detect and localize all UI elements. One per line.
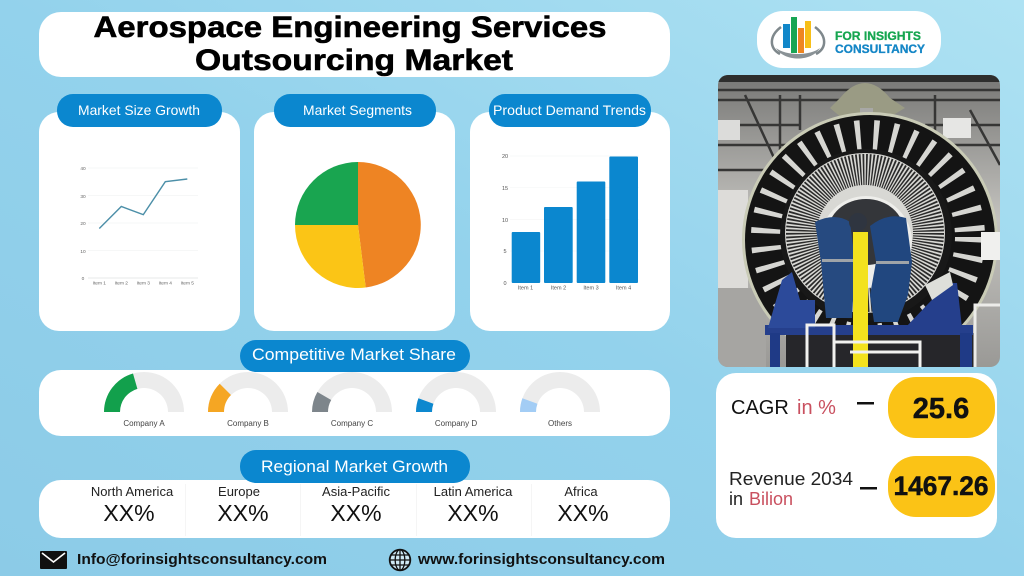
bar chart: 0 bbox=[503, 281, 507, 287]
heading: market size growth bbox=[57, 94, 222, 127]
stat: latin america: XX% bbox=[447, 500, 499, 526]
photo: engine technicians bbox=[718, 75, 1000, 368]
pie chart bbox=[295, 162, 421, 288]
line chart: Item 3 bbox=[137, 280, 150, 286]
heading: product demand trends bbox=[489, 94, 651, 127]
line chart: Item 1 bbox=[93, 280, 106, 286]
title panel: Aerospace Engineering Services bbox=[94, 11, 606, 44]
stat: revenue 2034: in bbox=[729, 489, 743, 509]
line chart: 20 bbox=[80, 221, 86, 227]
bar chart: 20 bbox=[502, 154, 508, 160]
heading: regional market growth bbox=[240, 450, 470, 483]
heading: market size growth: Market Size Growth bbox=[78, 102, 200, 118]
icon: envelope bbox=[40, 551, 67, 569]
stat: europe: XX% bbox=[217, 500, 269, 526]
line chart: 10 bbox=[80, 249, 86, 255]
bar chart: 5 bbox=[503, 249, 507, 255]
gauge: company c bbox=[312, 372, 392, 428]
stat: revenue 2034 bbox=[729, 456, 995, 517]
gauge: company d: Company D bbox=[435, 419, 477, 428]
stat: cagr: CAGR bbox=[731, 397, 789, 419]
title panel: Outsourcing Market bbox=[195, 44, 513, 77]
gauge: company a bbox=[104, 372, 184, 428]
panel: competitive market share bbox=[39, 340, 670, 436]
heading: competitive market share: Competitive Market Share bbox=[252, 345, 456, 364]
stat: north america: North America bbox=[91, 484, 174, 499]
gauge: company d bbox=[416, 372, 496, 428]
bar chart: Item 4 bbox=[616, 286, 631, 292]
bar chart bbox=[502, 154, 639, 292]
contact website: www.forinsightsconsultancy.com bbox=[417, 551, 665, 568]
stat: africa: Africa bbox=[564, 484, 598, 499]
line chart bbox=[80, 166, 198, 286]
panel: regional market growth bbox=[39, 450, 670, 538]
heading: market segments bbox=[274, 94, 436, 127]
heading: product demand trends: Product Demand Trends bbox=[493, 102, 646, 118]
stat: asia-pacific bbox=[322, 484, 390, 526]
line chart: Item 4 bbox=[159, 280, 172, 286]
line chart: 40 bbox=[80, 166, 86, 172]
title panel bbox=[39, 11, 670, 77]
stat: revenue 2034: Bilion bbox=[749, 489, 793, 509]
stat: revenue 2034: Revenue 2034 bbox=[729, 469, 853, 489]
panel: market segments bbox=[254, 94, 455, 331]
heading: regional market growth: Regional Market Growth bbox=[261, 457, 448, 476]
contact email: Info@forinsightsconsultancy.com bbox=[77, 551, 327, 568]
bar chart: Item 1 bbox=[518, 286, 533, 292]
gauge: company b bbox=[208, 372, 288, 428]
line chart: Item 2 bbox=[115, 280, 128, 286]
stat: asia-pacific: Asia-Pacific bbox=[322, 484, 390, 499]
stat: asia-pacific: XX% bbox=[330, 500, 382, 526]
stat: latin america bbox=[434, 484, 513, 526]
gauge: others bbox=[520, 372, 600, 428]
panel: product demand trends bbox=[470, 94, 670, 331]
stat: revenue 2034: 1467.26 bbox=[894, 471, 988, 501]
gauge: company a: Company A bbox=[123, 419, 165, 428]
stat: latin america: Latin America bbox=[434, 484, 513, 499]
stat: north america: XX% bbox=[103, 500, 155, 526]
logo: CONSULTANCY bbox=[835, 42, 925, 56]
gauge: company b: Company B bbox=[227, 419, 269, 428]
line chart: Item 5 bbox=[181, 280, 194, 286]
heading: market segments: Market Segments bbox=[303, 102, 412, 118]
bar chart: Item 3 bbox=[583, 286, 599, 292]
line chart: 30 bbox=[80, 194, 86, 200]
bar chart: Item 2 bbox=[551, 286, 566, 292]
stat: north america bbox=[91, 484, 174, 526]
stat: cagr: 25.6 bbox=[913, 393, 969, 425]
line chart: 0 bbox=[82, 276, 85, 282]
stat: europe: Europe bbox=[218, 484, 260, 499]
bar chart: 15 bbox=[502, 186, 508, 192]
stat: cagr bbox=[731, 377, 995, 438]
logo bbox=[757, 11, 941, 68]
logo: FOR INSIGHTS bbox=[835, 29, 921, 43]
stat: europe bbox=[217, 484, 269, 526]
rig and workers bbox=[765, 213, 1000, 367]
gauge: company c: Company C bbox=[331, 419, 373, 428]
panel: market size growth bbox=[39, 94, 240, 331]
icon: globe bbox=[390, 550, 410, 570]
stat: africa bbox=[557, 484, 609, 526]
engine fan ring bbox=[742, 112, 998, 336]
stat: cagr: in % bbox=[797, 397, 836, 419]
gauge: others: Others bbox=[548, 419, 572, 428]
heading: competitive market share bbox=[240, 340, 470, 372]
stat: africa: XX% bbox=[557, 500, 609, 526]
panel: key statistics bbox=[716, 373, 997, 538]
bar chart: 10 bbox=[502, 218, 508, 224]
